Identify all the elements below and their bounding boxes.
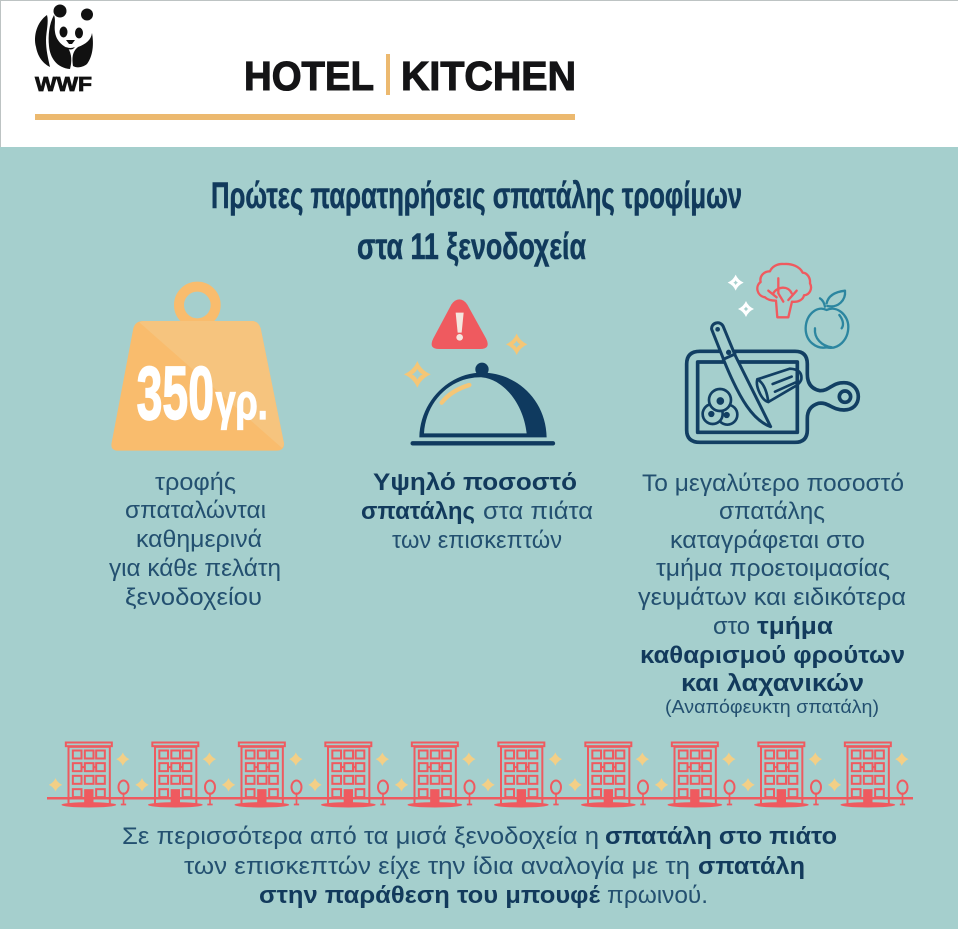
peach — [806, 291, 848, 348]
broccoli — [757, 264, 811, 317]
text: column 3: Το μεγαλύτερο ποσοστό — [642, 470, 904, 497]
main heading: στα 11 ξενοδοχεία — [357, 226, 586, 267]
text: column 1: τροφής — [155, 469, 236, 496]
header title: HOTEL KITCHEN: HOTEL — [244, 53, 374, 99]
text: column 1: σπαταλώνται — [125, 497, 266, 524]
text: column 3: και λαχανικών — [681, 670, 864, 697]
bottom statement: σπατάλη στο πιάτο — [605, 823, 837, 850]
header title: HOTEL KITCHEN: KITCHEN — [401, 53, 576, 99]
text: column 1: για κάθε πελάτη — [109, 555, 281, 582]
text: column 3 — [638, 470, 906, 717]
icon: weight 350 gr — [111, 287, 284, 451]
icon row: hotels and trees — [47, 742, 913, 807]
text: column 2: στα πιάτα — [483, 498, 593, 525]
bottom statement: σπατάλη — [698, 853, 805, 880]
icon: weight 350 gr: 350 — [137, 351, 214, 435]
main heading — [211, 175, 742, 267]
text: column 3: τμήμα προετοιμασίας — [656, 555, 890, 582]
logo: WWF panda — [35, 4, 93, 96]
bottom statement: των επισκεπτών είχε την ίδια αναλογία με τη — [184, 853, 690, 880]
text: column 2 — [361, 469, 593, 554]
text: column 3: (Αναπόφευκτη σπατάλη) — [665, 697, 879, 717]
text: column 2: σπατάλης — [361, 498, 475, 525]
bottom statement: Σε περισσότερα από τα μισά ξενοδοχεία η — [122, 823, 599, 850]
main heading: Πρώτες παρατηρήσεις σπατάλης τροφίμων — [211, 175, 742, 216]
icon: cutting board with knife and produce — [687, 264, 858, 442]
knife — [712, 323, 771, 427]
board — [687, 351, 858, 442]
sparkles — [728, 275, 744, 291]
text: column 3: σπατάλης — [719, 498, 825, 525]
text: column 3: στο — [713, 613, 750, 640]
text: column 3: τμήμα — [757, 613, 833, 640]
bottom statement: πρωινού. — [607, 882, 708, 909]
cucumber — [757, 369, 801, 402]
bottom statement — [122, 823, 837, 909]
text: column 2: των επισκεπτών — [392, 527, 562, 554]
text: column 1: καθημερινά — [136, 526, 262, 553]
text: column 3: καθαρισμού φρούτων — [640, 642, 905, 669]
header title: HOTEL KITCHEN — [244, 53, 576, 99]
bottom statement: στην παράθεση του μπουφέ — [259, 882, 600, 909]
icon: cloche with warning — [404, 299, 553, 443]
text: column 3: καταγράφεται στο — [670, 527, 865, 554]
text: column 2: Υψηλό ποσοστό — [373, 469, 577, 496]
cucumber slices — [703, 389, 737, 425]
icon: weight 350 gr: γρ. — [216, 374, 268, 430]
header rule — [35, 114, 575, 120]
text: column 1: ξενοδοχείου — [125, 584, 262, 611]
text: column 3: γευμάτων και ειδικότερα — [638, 584, 906, 611]
text: column 1 — [109, 469, 281, 611]
logo: WWF panda: WWF — [35, 74, 92, 96]
